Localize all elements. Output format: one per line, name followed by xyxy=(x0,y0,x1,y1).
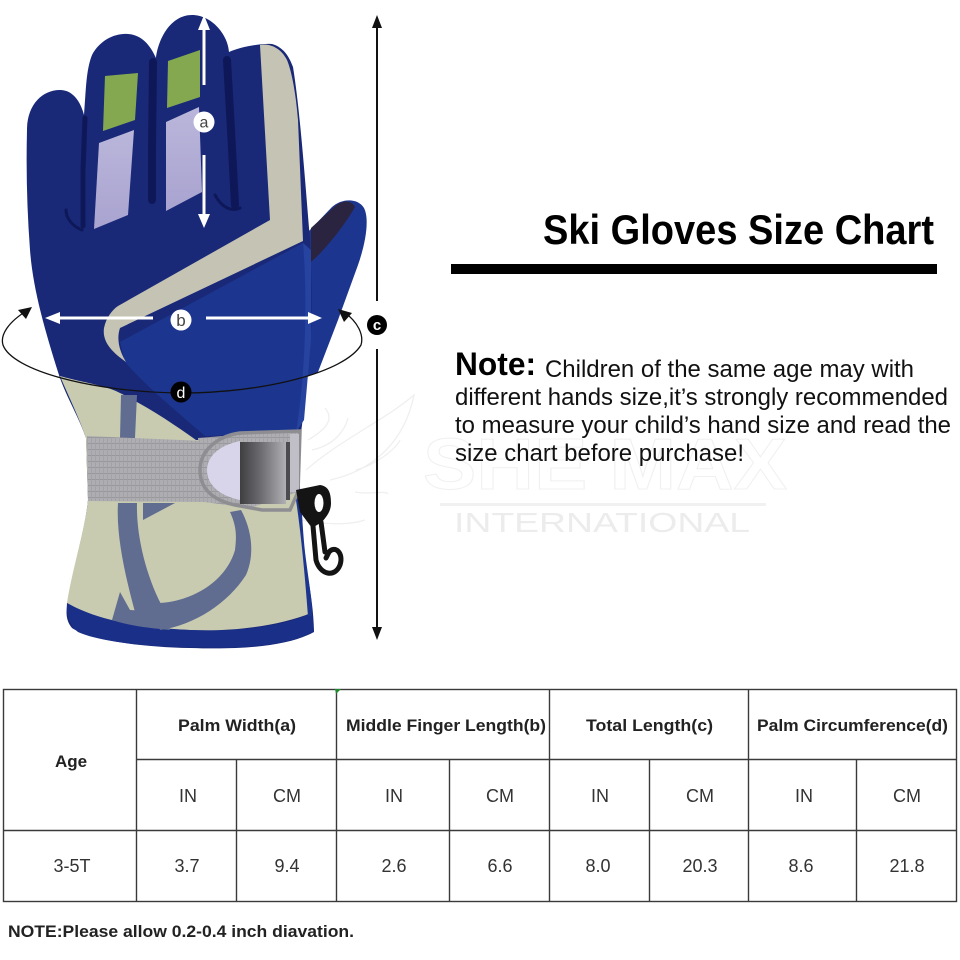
header: middle finger length: Middle Finger Length(b) xyxy=(346,716,546,735)
c label badge: c xyxy=(373,317,381,334)
middle finger lavender patch xyxy=(166,107,202,211)
dimension c: total length arrow xyxy=(367,15,387,640)
clip hook xyxy=(313,522,341,573)
d arrow right xyxy=(338,309,352,322)
b arrow left xyxy=(45,312,153,324)
buckle window xyxy=(207,441,240,500)
anchor arc xyxy=(150,510,251,630)
c label badge xyxy=(367,315,387,335)
data row xyxy=(53,856,925,876)
header: total length: Total Length(c) xyxy=(586,716,713,735)
watermark: She Max International xyxy=(300,395,787,538)
unit cell: CM xyxy=(273,786,301,806)
a label badge xyxy=(194,112,214,132)
buckle frame xyxy=(200,431,300,510)
d label badge xyxy=(170,382,192,402)
a label badge: a xyxy=(200,114,209,132)
note line 4: size chart before purchase! xyxy=(455,440,744,467)
header: palm circumference: Palm Circumference(d) xyxy=(757,716,948,735)
note line 3: to measure your child’s hand size and read the xyxy=(455,412,951,439)
d ellipse curve xyxy=(2,310,362,393)
right side panel xyxy=(296,243,311,432)
unit cell: IN xyxy=(179,786,197,806)
ring finger lavender patch xyxy=(94,130,134,229)
buckle dark slot xyxy=(240,442,286,504)
total length in: 8.0 xyxy=(585,856,611,876)
a arrow lower xyxy=(198,155,210,228)
note heading: Note: xyxy=(455,346,536,382)
zipper clip xyxy=(296,485,341,573)
unit cell: CM xyxy=(686,786,714,806)
b label badge: b xyxy=(176,311,186,330)
beige chevron stripe xyxy=(104,45,303,362)
title rule xyxy=(451,264,937,274)
note line 1: Children of the same age may with xyxy=(545,356,914,383)
circumference in: 8.6 xyxy=(788,856,814,876)
unit cell: IN xyxy=(795,786,813,806)
cuff hem band xyxy=(67,603,314,647)
palm width cm: 9.4 xyxy=(274,856,300,876)
c arrow upper xyxy=(372,15,382,301)
b label badge xyxy=(170,310,192,330)
a arrow upper xyxy=(198,15,210,85)
unit cell: IN xyxy=(591,786,609,806)
clip hole xyxy=(314,494,324,512)
anchor left barb xyxy=(112,592,170,630)
dimension b: palm width arrow xyxy=(45,310,322,330)
unit cell: CM xyxy=(486,786,514,806)
finger length in: 2.6 xyxy=(381,856,407,876)
header: age: Age xyxy=(55,752,87,771)
note text block xyxy=(455,346,951,467)
header: palm width: Palm Width(a) xyxy=(178,716,296,735)
anchor stem lower xyxy=(118,503,163,625)
c arrow lower xyxy=(372,349,382,640)
ring finger green patch xyxy=(103,73,138,131)
wrist panel blue xyxy=(120,243,308,436)
thumb xyxy=(300,200,367,380)
header cells xyxy=(55,716,948,771)
b arrow right xyxy=(206,312,322,324)
wrist strap xyxy=(87,436,205,502)
cuff side strip xyxy=(296,480,312,616)
age value: 3-5T xyxy=(53,856,91,876)
watermark subtitle: INTERNATIONAL xyxy=(454,507,750,538)
finger gaps xyxy=(66,60,240,230)
beige cuff xyxy=(60,376,311,630)
watermark wing xyxy=(300,395,414,524)
d arrow left xyxy=(18,307,32,319)
strap end xyxy=(198,430,300,508)
watermark wordmark: SHE MAX xyxy=(423,425,787,505)
buckle strap end xyxy=(290,434,299,492)
unit cell: IN xyxy=(385,786,403,806)
circumference cm: 21.8 xyxy=(889,856,925,876)
anchor print xyxy=(112,395,251,630)
green cell marker xyxy=(335,689,341,694)
watermark rule xyxy=(440,503,766,506)
anchor stem upper xyxy=(120,395,137,438)
clip block xyxy=(296,485,331,528)
glove body xyxy=(27,15,314,648)
palm width in: 3.7 xyxy=(174,856,200,876)
thumb lining xyxy=(311,202,355,262)
middle finger green patch xyxy=(167,50,200,108)
table grid xyxy=(3,689,956,902)
unit cell: CM xyxy=(893,786,921,806)
dimension d: circumference ellipse xyxy=(2,307,362,402)
d label badge: d xyxy=(177,385,185,402)
note line 2: different hands size,it’s strongly recommended xyxy=(455,384,948,411)
footnote: NOTE:Please allow 0.2-0.4 inch diavation. xyxy=(8,922,354,941)
finger length cm: 6.6 xyxy=(487,856,513,876)
size table xyxy=(3,689,956,902)
dimension a: finger length arrow xyxy=(194,15,214,228)
total length cm: 20.3 xyxy=(682,856,718,876)
buckle bar xyxy=(286,442,290,500)
glove illustration xyxy=(27,15,367,648)
unit row xyxy=(179,786,921,806)
anchor right barb xyxy=(143,503,175,520)
